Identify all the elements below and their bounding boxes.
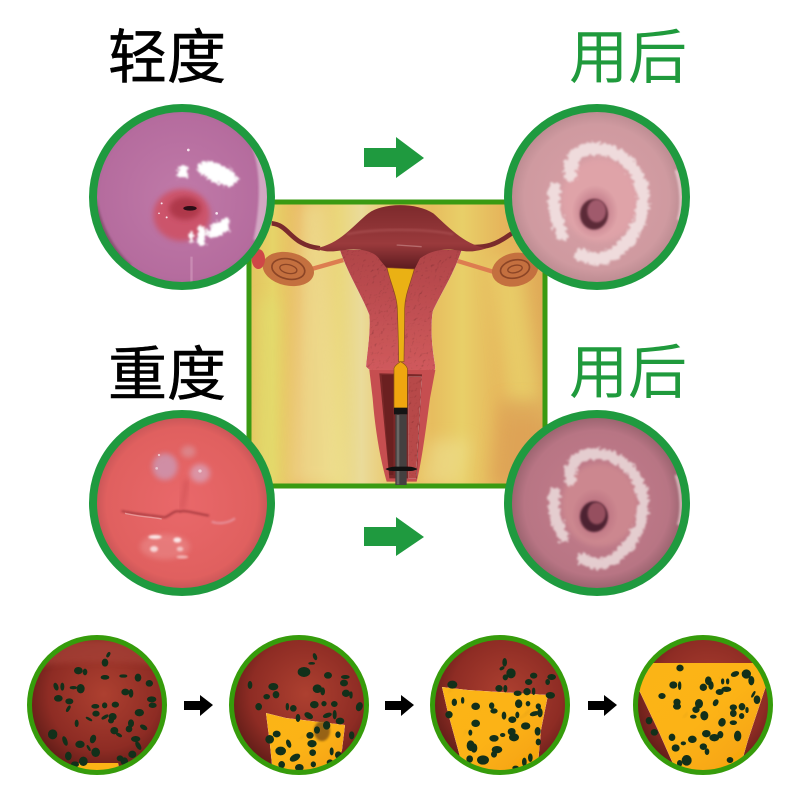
title: mild: 轻度	[108, 25, 226, 91]
arrow: bottom green	[364, 517, 424, 556]
uterus illustration	[252, 205, 541, 485]
ovary, right	[457, 249, 541, 291]
panel: central anatomy illustration	[249, 202, 545, 486]
uterine wall	[340, 250, 462, 371]
step 1 circle	[29, 637, 170, 780]
arrow: step 3 to 4	[588, 695, 617, 716]
step 3 circle	[432, 637, 568, 775]
title: severe: 重度	[108, 342, 226, 408]
photo: after use, top	[507, 107, 687, 287]
arrow: step 2 to 3	[385, 695, 414, 716]
uterine fundus	[315, 205, 487, 270]
applicator	[385, 362, 417, 485]
photo: after use, bottom	[507, 413, 687, 593]
photo: mild condition	[92, 107, 272, 287]
photo: severe condition	[92, 413, 272, 593]
step 2 circle	[231, 637, 367, 775]
vaginal canal	[369, 370, 435, 482]
ovary, left	[252, 247, 343, 291]
cervical canal, yellow medicine	[387, 268, 414, 362]
arrow: step 1 to 2	[184, 695, 213, 716]
step 4 circle	[635, 637, 771, 775]
title: after use, top: 用后	[569, 25, 687, 91]
title: after use, bottom: 用后	[569, 340, 687, 406]
fallopian tubes	[272, 223, 512, 248]
arrow: top green	[364, 137, 424, 178]
